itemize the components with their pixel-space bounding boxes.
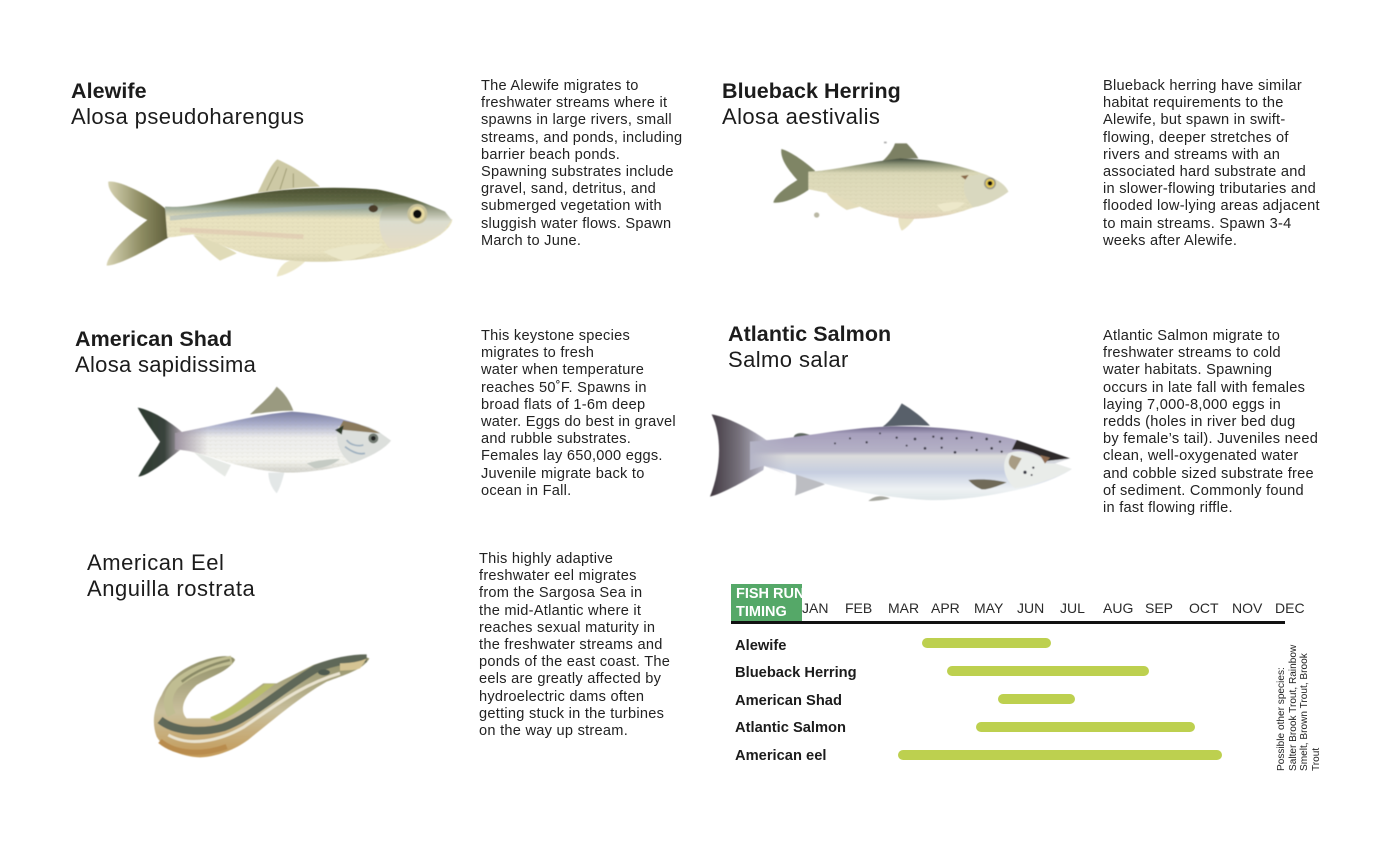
- heading: American Shad: American Shad: [75, 327, 232, 351]
- heading: Atlantic Salmon: [728, 322, 891, 372]
- chart row: Blueback Herring: Blueback Herring: [735, 665, 857, 681]
- text: American Eel description: on the way up stream.: [479, 723, 628, 739]
- text: American Shad description: and rubble substrates.: [481, 431, 631, 447]
- text: American Shad description: ocean in Fall.: [481, 483, 571, 499]
- chart title: fish run timing badge: TIMING: [736, 604, 787, 620]
- text: Alewife description: barrier beach ponds.: [481, 147, 620, 163]
- heading: American Eel: [87, 550, 255, 601]
- chart row: Atlantic Salmon: [735, 720, 1195, 736]
- text: American Shad description: water when temperature: [481, 362, 644, 378]
- text: American Eel description: hydroelectric dams often: [479, 689, 644, 705]
- icon: alewife fish illustration: [106, 159, 453, 277]
- month axis labels: MAY: [974, 600, 1003, 616]
- text: Atlantic Salmon description: Atlantic Salmon migrate to: [1103, 328, 1280, 344]
- chart row: Atlantic Salmon: Atlantic Salmon: [735, 720, 846, 736]
- text: Atlantic Salmon description: water habitats. Spawning: [1103, 362, 1272, 378]
- heading: Atlantic Salmon: Atlantic Salmon: [728, 322, 891, 346]
- text: Atlantic Salmon description: and cobble sized substrate free: [1103, 466, 1314, 482]
- icon: American eel illustration: [153, 654, 370, 758]
- text: Atlantic Salmon description: freshwater streams to cold: [1103, 345, 1281, 361]
- chart row: Blueback Herring: [735, 665, 1149, 681]
- chart row: American Shad: [735, 693, 1075, 709]
- text: Blueback Herring description: Blueback herring have similar: [1103, 78, 1302, 94]
- text: Atlantic Salmon description: laying 7,000-8,000 eggs in: [1103, 397, 1281, 413]
- heading: Blueback Herring: [722, 79, 901, 129]
- heading: Blueback Herring: Alosa aestivalis: [722, 104, 880, 129]
- heading: American Shad: Alosa sapidissima: [75, 352, 256, 377]
- chart title: fish run timing badge: [731, 584, 802, 622]
- heading: Blueback Herring: Blueback Herring: [722, 79, 901, 103]
- text: Atlantic Salmon description: [1103, 328, 1318, 516]
- text: American Shad description: Juvenile migrate back to: [481, 466, 645, 482]
- text: Blueback Herring description: flowing, deeper stretches of: [1103, 130, 1289, 146]
- text: Atlantic Salmon description: of sediment. Commonly found: [1103, 483, 1304, 499]
- text: Blueback Herring description: habitat requirements to the: [1103, 95, 1284, 111]
- text: American Eel description: the mid-Atlantic where it: [479, 603, 641, 619]
- chart row: American Shad: American Shad: [735, 693, 842, 709]
- text: Alewife description: Spawning substrates include: [481, 164, 674, 180]
- month axis labels: FEB: [845, 600, 872, 616]
- text: American Eel description: eels are greatly affected by: [479, 671, 661, 687]
- month axis labels: JUL: [1060, 600, 1085, 616]
- month axis labels: SEP: [1145, 600, 1173, 616]
- text: Atlantic Salmon description: in fast flowing riffle.: [1103, 500, 1233, 516]
- text: American Eel description: reaches sexual maturity in: [479, 620, 655, 636]
- text: American Shad description: [481, 328, 676, 499]
- text: American Eel description: This highly adaptive: [479, 551, 613, 567]
- chart row: American eel: [735, 748, 1222, 764]
- text: Blueback Herring description: associated hard substrate and: [1103, 164, 1306, 180]
- heading: Alewife: Alewife: [71, 79, 147, 103]
- month axis labels: DEC: [1275, 600, 1305, 616]
- heading: American Eel: Anguilla rostrata: [87, 576, 255, 601]
- text: Alewife description: spawns in large rivers, small: [481, 112, 672, 128]
- month axis labels: NOV: [1232, 600, 1262, 616]
- text: Alewife description: freshwater streams where it: [481, 95, 667, 111]
- text: American Shad description: broad flats of 1-6m deep: [481, 397, 645, 413]
- text: Alewife description: submerged vegetation with: [481, 198, 662, 214]
- text: Atlantic Salmon description: clean, well-oxygenated water: [1103, 448, 1298, 464]
- text: Atlantic Salmon description: by female’s tail). Juveniles need: [1103, 431, 1318, 447]
- text: Alewife description: streams, and ponds, including: [481, 130, 682, 146]
- text: Alewife description: sluggish water flows. Spawn: [481, 216, 671, 232]
- note: possible other species: Trout: [1310, 748, 1322, 771]
- text: American Shad description: water. Eggs do best in gravel: [481, 414, 676, 430]
- panel: American Shad: [75, 327, 676, 499]
- chart row: American eel: American eel: [735, 748, 826, 764]
- text: Blueback Herring description: weeks after Alewife.: [1103, 233, 1237, 249]
- icon: American shad fish illustration: [137, 386, 391, 493]
- text: American Eel description: [479, 551, 670, 739]
- note: possible other species: [1276, 644, 1322, 771]
- month axis labels: JAN: [802, 600, 828, 616]
- text: Alewife description: The Alewife migrates to: [481, 78, 639, 94]
- text: Atlantic Salmon description: occurs in late fall with females: [1103, 380, 1305, 396]
- text: Alewife description: [481, 78, 682, 249]
- text: Atlantic Salmon description: redds (holes in river bed dug: [1103, 414, 1296, 430]
- note: possible other species: Possible other species:: [1276, 667, 1287, 771]
- note: possible other species: Smelt, Brown Trout, Brook: [1299, 653, 1310, 771]
- icon: Atlantic salmon fish illustration: [710, 403, 1072, 502]
- panel: Alewife: [71, 78, 682, 277]
- text: Blueback Herring description: flooded low-lying areas adjacent: [1103, 198, 1320, 214]
- text: American Shad description: reaches 50˚F. Spawns in: [481, 380, 647, 396]
- text: Blueback Herring description: to main streams. Spawn 3-4: [1103, 216, 1291, 232]
- heading: American Eel: American Eel: [87, 550, 224, 575]
- panel: Atlantic Salmon: [710, 322, 1318, 516]
- heading: Alewife: Alosa pseudoharengus: [71, 104, 304, 129]
- text: American Shad description: Females lay 650,000 eggs.: [481, 448, 663, 464]
- text: American Eel description: the freshwater streams and: [479, 637, 663, 653]
- text: Blueback Herring description: [1103, 78, 1320, 249]
- text: American Shad description: migrates to fresh: [481, 345, 594, 361]
- text: Alewife description: March to June.: [481, 233, 581, 249]
- chart row: Alewife: Alewife: [735, 638, 786, 654]
- month axis labels: [731, 600, 1305, 624]
- text: Blueback Herring description: in slower-flowing tributaries and: [1103, 181, 1316, 197]
- text: Alewife description: gravel, sand, detritus, and: [481, 181, 656, 197]
- text: American Eel description: freshwater eel migrates: [479, 568, 637, 584]
- month axis labels: AUG: [1103, 600, 1133, 616]
- panel: American Eel: [87, 550, 670, 758]
- text: American Eel description: getting stuck in the turbines: [479, 706, 664, 722]
- month axis labels: APR: [931, 600, 960, 616]
- month axis labels: JUN: [1017, 600, 1044, 616]
- text: American Eel description: from the Sargosa Sea in: [479, 585, 642, 601]
- month axis labels: OCT: [1189, 600, 1219, 616]
- text: American Shad description: This keystone species: [481, 328, 630, 344]
- note: possible other species: Salter Brook Trout, Rainbow: [1288, 645, 1298, 771]
- heading: American Shad: [75, 327, 256, 377]
- icon: blueback herring fish illustration: [772, 141, 1009, 231]
- text: Blueback Herring description: rivers and streams with an: [1103, 147, 1280, 163]
- heading: Alewife: [71, 79, 304, 129]
- month axis labels: MAR: [888, 600, 919, 616]
- heading: Atlantic Salmon: Salmo salar: [728, 347, 849, 372]
- panel: Blueback Herring: [722, 78, 1320, 249]
- chart: fish run timing: [731, 584, 802, 621]
- text: American Eel description: ponds of the east coast. The: [479, 654, 670, 670]
- text: Blueback Herring description: Alewife, but spawn in swift-: [1103, 112, 1285, 128]
- chart row: Alewife: [735, 638, 1051, 654]
